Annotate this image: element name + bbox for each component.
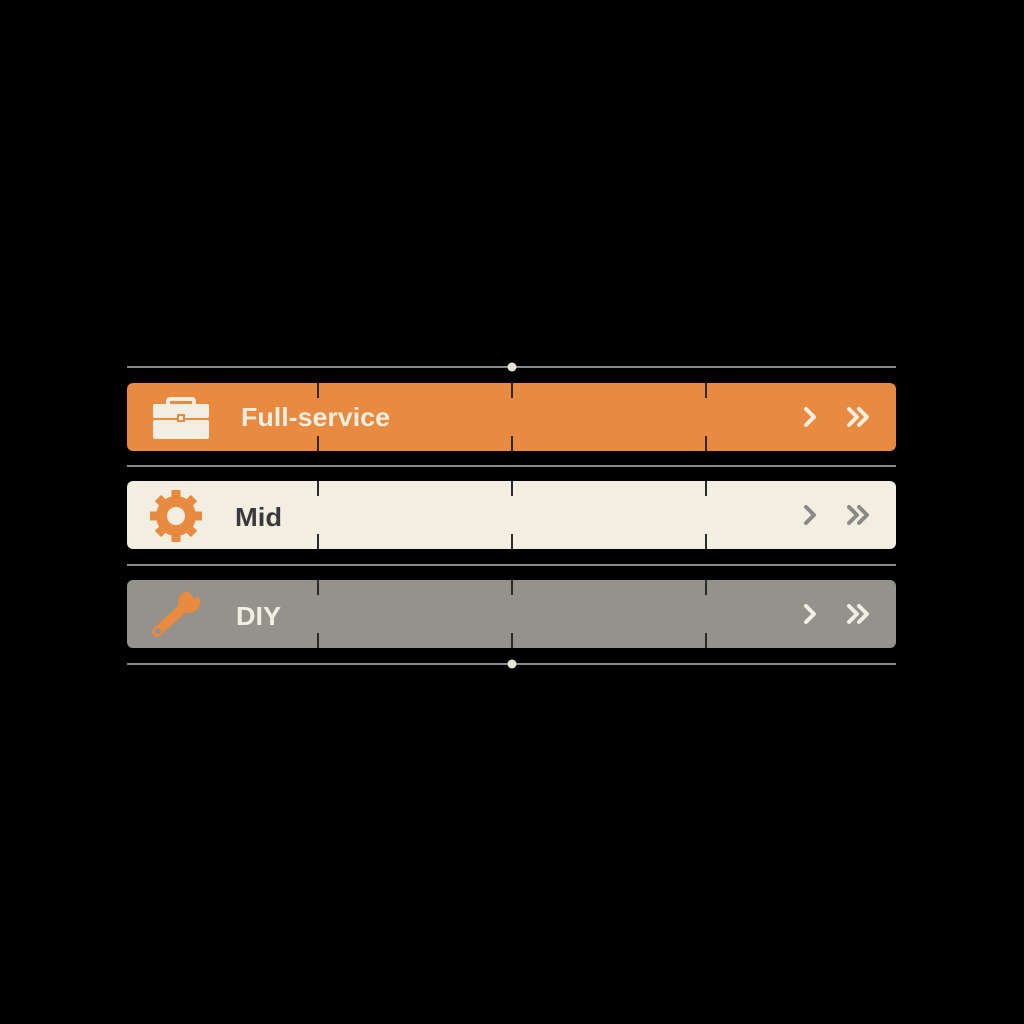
bar: Mid [127, 481, 896, 549]
label: Full-service: Full-service [241, 402, 390, 432]
arrows [806, 409, 867, 425]
icon: briefcase [153, 397, 209, 439]
icon: gear [150, 490, 202, 542]
bar: DIY [127, 580, 896, 648]
icon: wrench [155, 584, 202, 634]
label: Mid: Mid [235, 502, 282, 532]
bar: Full-service [127, 383, 896, 451]
arrows [806, 507, 867, 523]
arrows [806, 606, 867, 622]
label: DIY: DIY [236, 601, 281, 631]
